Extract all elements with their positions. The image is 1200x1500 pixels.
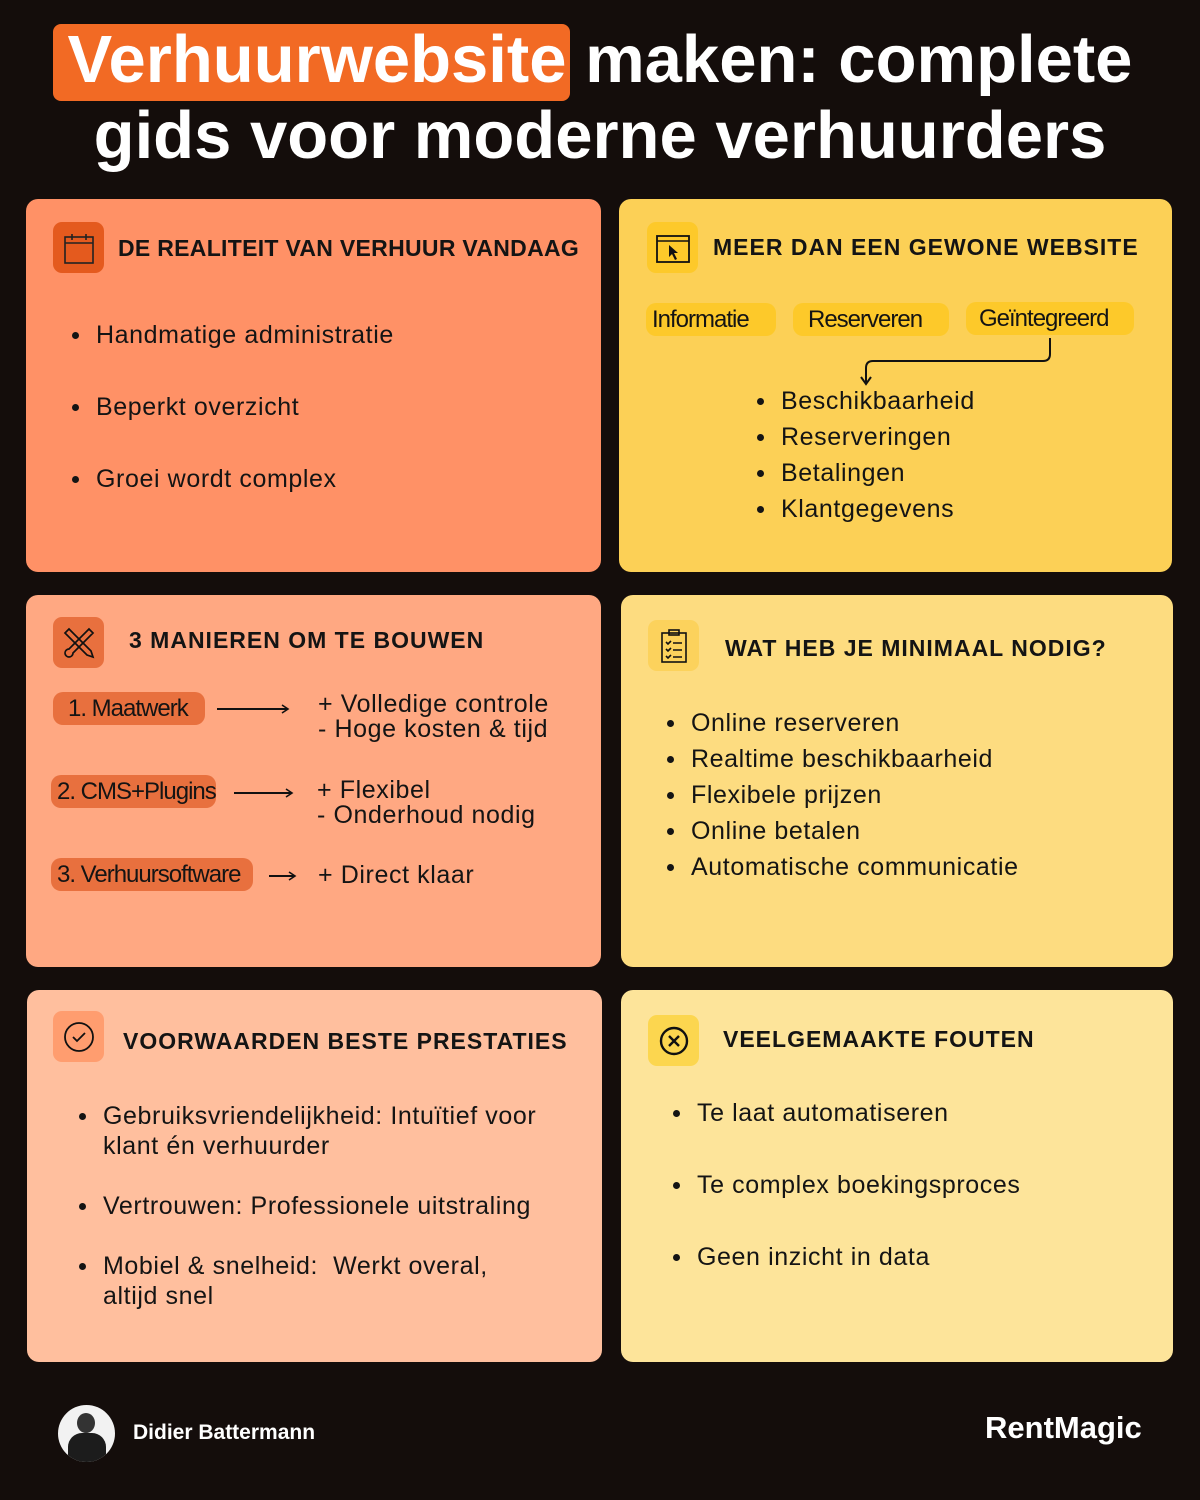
row 2: 2. CMS+Plugins xyxy=(57,778,216,805)
list: altijd snel xyxy=(103,1282,214,1310)
list: Te laat automatiseren xyxy=(697,1099,949,1127)
footer: author: Didier Battermann xyxy=(133,1421,315,1444)
list: Gebruiksvriendelijkheid: Intuïtief voor xyxy=(103,1102,536,1130)
avatar xyxy=(58,1405,115,1462)
title: gids voor moderne verhuurders xyxy=(94,98,1106,173)
list: Groei wordt complex xyxy=(96,465,337,493)
heading: MEER DAN EEN GEWONE WEBSITE xyxy=(713,234,1139,260)
panel: voorwaarden xyxy=(27,990,602,1362)
panel: 3 manieren: - Onderhoud nodig xyxy=(317,801,536,829)
list: Geen inzicht in data xyxy=(697,1243,930,1271)
icon: calendar xyxy=(53,222,104,273)
list: Realtime beschikbaarheid xyxy=(691,745,993,773)
icon: check circle xyxy=(53,1011,104,1062)
pills: Informatie xyxy=(652,306,749,333)
title: Verhuurwebsite maken: complete xyxy=(68,22,1132,97)
heading: DE REALITEIT VAN VERHUUR VANDAAG xyxy=(118,235,579,261)
list: Betalingen xyxy=(781,459,905,487)
heading: 3 MANIEREN OM TE BOUWEN xyxy=(129,627,484,653)
panel: meer dan website: Reserveren xyxy=(808,306,922,333)
row 1: 1. Maatwerk xyxy=(68,695,188,722)
title xyxy=(53,22,1132,173)
list: Te complex boekingsproces xyxy=(697,1171,1020,1199)
panel: minimaal nodig xyxy=(621,595,1173,967)
icon: tools xyxy=(53,617,104,668)
list: Beperkt overzicht xyxy=(96,393,299,421)
heading: VEELGEMAAKTE FOUTEN xyxy=(723,1026,1035,1052)
list xyxy=(673,1099,1020,1271)
list xyxy=(72,321,394,493)
heading: VOORWAARDEN BESTE PRESTATIES xyxy=(123,1028,568,1054)
arrow xyxy=(860,338,1051,386)
panel: 3 manieren: - Hoge kosten & tijd xyxy=(318,715,548,743)
list: Handmatige administratie xyxy=(96,321,394,349)
panel: 3 manieren xyxy=(26,595,601,967)
list: Flexibele prijzen xyxy=(691,781,882,809)
list xyxy=(667,709,1019,881)
footer: logo: RentMagic xyxy=(985,1410,1142,1445)
heading: WAT HEB JE MINIMAAL NODIG? xyxy=(725,635,1107,661)
panel: meer dan website: Geïntegreerd xyxy=(979,305,1108,332)
list: Klantgegevens xyxy=(781,495,954,523)
footer: author xyxy=(58,1405,315,1462)
list: Beschikbaarheid xyxy=(781,387,975,415)
list: Reserveringen xyxy=(781,423,951,451)
list xyxy=(757,387,975,523)
row 3: 3. Verhuursoftware xyxy=(57,861,240,888)
list xyxy=(79,1102,536,1310)
icon: x circle xyxy=(648,1015,699,1066)
row 1 xyxy=(53,692,205,725)
panel: fouten xyxy=(621,990,1173,1362)
icon: browser cursor xyxy=(647,222,698,273)
list: Online betalen xyxy=(691,817,861,845)
list: Automatische communicatie xyxy=(691,853,1019,881)
panel: 3 manieren: + Volledige controle xyxy=(318,690,549,718)
panel: 3 manieren: + Flexibel xyxy=(317,776,431,804)
pills xyxy=(646,303,776,336)
panel: realiteit xyxy=(26,199,601,572)
title highlight xyxy=(53,24,570,101)
list: Vertrouwen: Professionele uitstraling xyxy=(103,1192,531,1220)
icon: clipboard xyxy=(648,620,699,671)
list: Mobiel & snelheid: Werkt overal, xyxy=(103,1252,488,1280)
list: klant én verhuurder xyxy=(103,1132,330,1160)
panel: 3 manieren: + Direct klaar xyxy=(318,861,474,889)
panel: meer dan website xyxy=(619,199,1172,572)
list: Online reserveren xyxy=(691,709,900,737)
